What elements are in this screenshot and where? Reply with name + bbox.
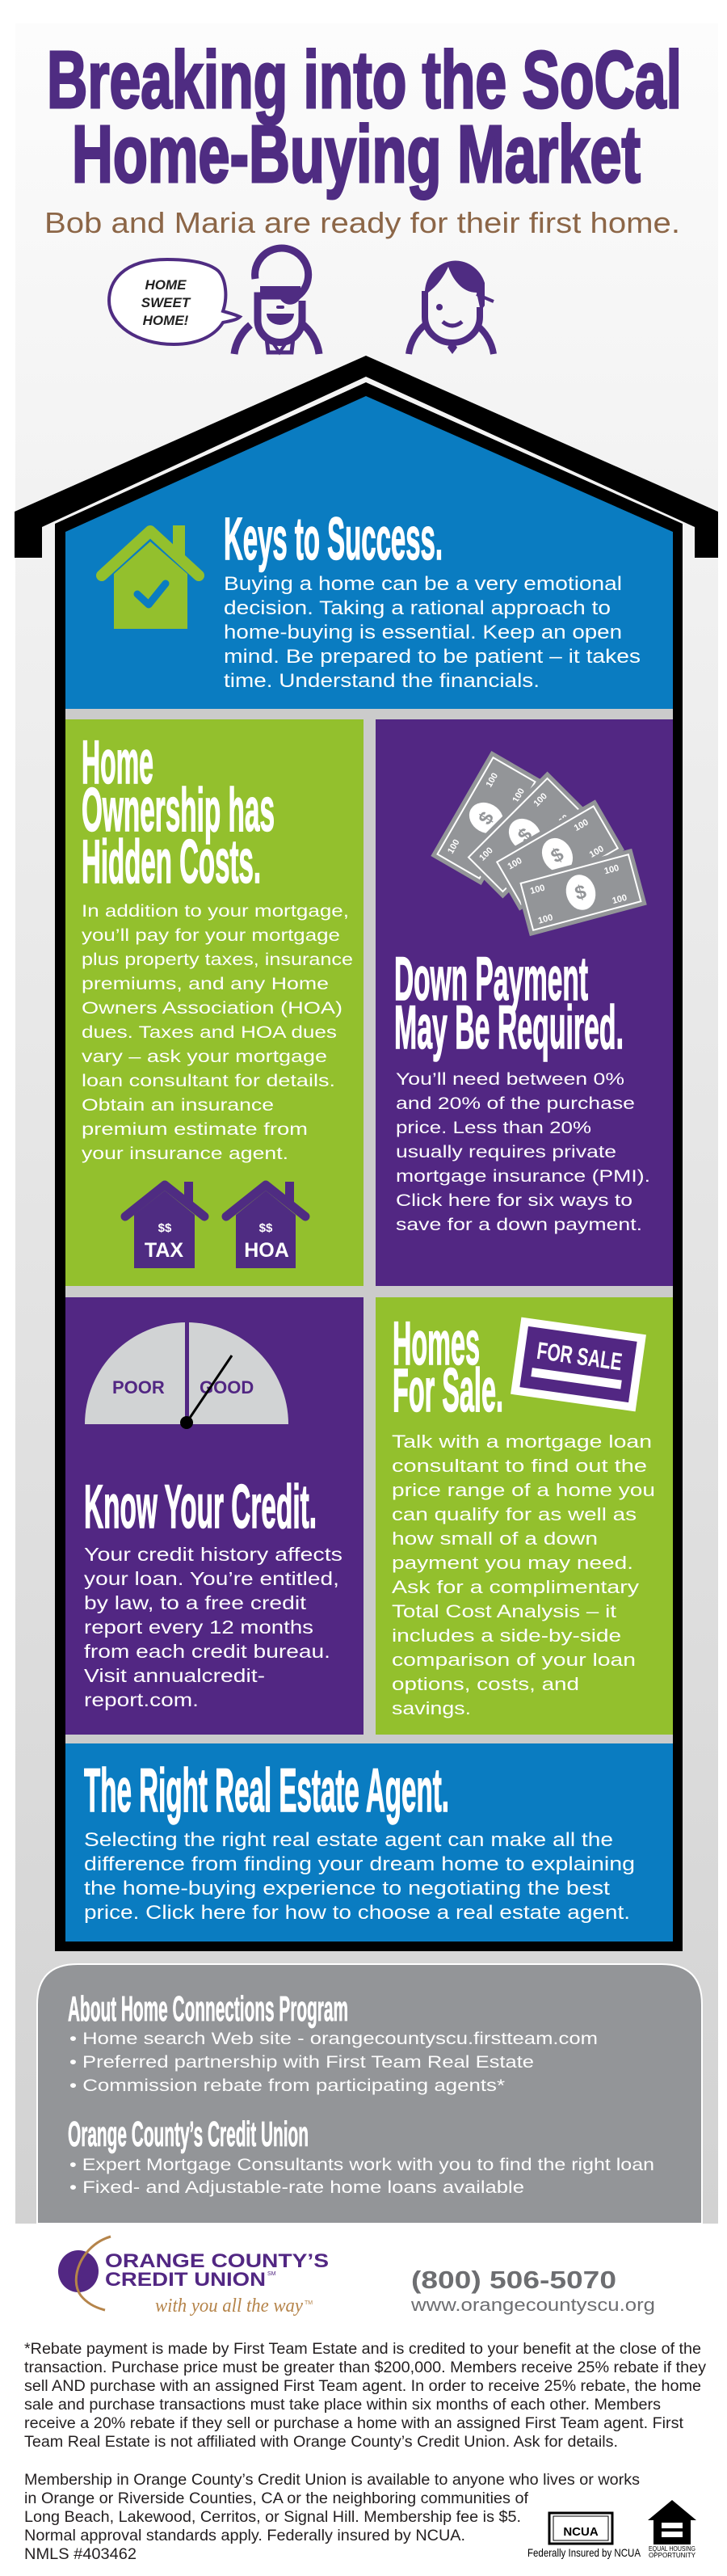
- text: credit body: from each credit bureau.: [84, 1641, 330, 1662]
- icon: tax house: [125, 1182, 204, 1268]
- subtitle: Bob and Maria are ready for their first home.: [44, 206, 680, 239]
- text: membership note: [24, 2472, 640, 2563]
- character: Maria: [409, 261, 494, 354]
- panel: know your credit: Know Your Credit.: [84, 1473, 317, 1541]
- icon: equal housing: [648, 2500, 696, 2559]
- text: credit body: report.com.: [84, 1689, 199, 1710]
- icon: money bills: $: [474, 807, 499, 828]
- speech bubble: SWEET: [141, 295, 191, 310]
- logo: orange county's credit union: CREDIT UNION: [105, 2269, 266, 2291]
- contact: phone and url: [410, 2266, 655, 2315]
- icon: money bills: 100: [553, 813, 571, 830]
- icon: tax house: TAX: [145, 1239, 183, 1262]
- text: keys body: home-buying is essential. Keep an open: [224, 622, 622, 643]
- text: membership note: NMLS #403462: [24, 2546, 137, 2563]
- logo: orange county's credit union: TM: [305, 2300, 313, 2306]
- logo: orange county's credit union: [58, 2237, 329, 2317]
- heading: hidden costs: Home: [82, 728, 153, 797]
- text: down payment body: price. Less than 20%: [396, 1119, 591, 1137]
- text: membership note: Membership in Orange County’s Credit Union is available to anyone who lives or works: [24, 2472, 640, 2489]
- speech bubble: [109, 259, 240, 344]
- icon: ncua logo: [527, 2513, 641, 2559]
- icon: money bills: 100: [499, 867, 517, 885]
- panel: hidden costs: Hidden Costs.: [82, 828, 261, 896]
- heading: homes for sale: [393, 1309, 503, 1425]
- icon: money bills: $: [573, 881, 589, 904]
- text: homes body: Total Cost Analysis – it: [392, 1601, 616, 1621]
- text: hidden costs body: Owners Association (HOA): [82, 999, 342, 1018]
- icon: credit gauge: [85, 1322, 288, 1429]
- icon: money bills: 100: [522, 883, 539, 898]
- text: down payment body: mortgage insurance (PMI).: [396, 1167, 650, 1186]
- icon: money bills: $: [514, 824, 537, 847]
- character: Bob: [234, 248, 319, 354]
- icon: equal housing: EQUAL HOUSING: [649, 2545, 695, 2553]
- text: down payment body: [396, 1070, 650, 1234]
- icon: money bills: 100: [477, 845, 495, 863]
- text: homes body: payment you may need.: [392, 1553, 633, 1573]
- text: homes body: can qualify for as well as: [392, 1504, 637, 1524]
- icon: money bills: [431, 751, 647, 936]
- text: membership note: in Orange or Riverside Counties, CA or the neighboring communities of: [24, 2490, 529, 2507]
- text: hidden costs body: Obtain an insurance: [82, 1096, 274, 1115]
- text: homes body: includes a side-by-side: [392, 1625, 621, 1646]
- contact: phone and url: www.orangecountyscu.org: [410, 2295, 655, 2315]
- text: hidden costs body: dues. Taxes and HOA dues: [82, 1023, 337, 1042]
- icon: money bills: 100: [532, 791, 549, 808]
- text: agent body: [84, 1829, 635, 1924]
- icon: money bills: 100: [529, 883, 546, 896]
- text: program bullets: • Home search Web site - orangecountyscu.firstteam.com: [69, 2030, 598, 2048]
- text: homes body: comparison of your loan: [392, 1650, 636, 1670]
- icon: money bills: 100: [537, 913, 554, 926]
- heading: down payment: [394, 945, 624, 1062]
- icon: equal housing: OPPORTUNITY: [649, 2552, 696, 2559]
- text: membership note: Long Beach, Lakewood, Cerritos, or Signal Hill. Membership fee is $5.: [24, 2509, 521, 2526]
- text: keys body: Buying a home can be a very emotional: [224, 573, 622, 595]
- text: down payment body: You’ll need between 0%: [396, 1070, 624, 1089]
- text: down payment body: usually requires private: [396, 1143, 616, 1162]
- text: credit body: Visit annualcredit-: [84, 1665, 265, 1686]
- icon: money bills: 100: [473, 854, 489, 871]
- text: homes body: options, costs, and: [392, 1674, 579, 1694]
- speech bubble: HOME: [145, 277, 187, 293]
- panel: hidden costs: [65, 719, 364, 1286]
- text: credit body: by law, to a free credit: [84, 1592, 307, 1613]
- icon: for sale sign: [511, 1318, 646, 1411]
- panel: hidden costs: Ownership has: [82, 776, 275, 845]
- text: rebate footnote: transaction. Purchase price must be greater than $200,000. Members receive 25% rebate if they: [24, 2359, 707, 2376]
- icon: for sale sign: FOR SALE: [536, 1338, 624, 1376]
- text: homes body: Ask for a complimentary: [392, 1577, 639, 1597]
- icon: money bills: 100: [588, 844, 606, 860]
- text: homes body: savings.: [392, 1698, 471, 1718]
- icon: money bills: 100: [446, 838, 462, 855]
- text: hidden costs body: vary – ask your mortgage: [82, 1048, 327, 1066]
- panel: homes for sale: [376, 1297, 673, 1735]
- icon: money bills: 100: [506, 856, 523, 871]
- text: down payment body: save for a down payment.: [396, 1216, 642, 1234]
- panel: about program: [37, 1964, 702, 2224]
- icon: money bills: $: [547, 843, 568, 868]
- logo: orange county's credit union: SM: [267, 2271, 276, 2277]
- text: rebate footnote: [24, 2341, 707, 2451]
- icon: hoa house: HOA: [244, 1239, 289, 1262]
- icon: credit gauge: POOR: [112, 1377, 165, 1398]
- icon: ncua logo: Federally Insured by NCUA: [527, 2546, 641, 2559]
- text: hidden costs body: premiums, and any Home: [82, 975, 329, 993]
- logo: orange county's credit union: with you all the way: [155, 2296, 303, 2317]
- panel: down payment: [376, 719, 673, 1286]
- panel: about program: Orange County’s Credit Union: [68, 2114, 309, 2154]
- text: program bullets: • Preferred partnership with First Team Real Estate: [69, 2053, 534, 2072]
- text: down payment body: Click here for six ways to: [396, 1191, 632, 1210]
- panel: real estate agent: [65, 1743, 673, 1941]
- text: rebate footnote: sale and purchase transactions must take place within six months of each other. Members: [24, 2397, 661, 2414]
- speech bubble: HOME!: [143, 313, 189, 328]
- text: down payment body: and 20% of the purchase: [396, 1094, 635, 1113]
- logo: orange county's credit union: ORANGE COUNTY’S: [105, 2250, 329, 2272]
- text: rebate footnote: sell AND purchase with an assigned First Team agent. In order to receive 25% rebate, the home: [24, 2378, 701, 2395]
- house frame: [55, 382, 683, 1951]
- text: agent body: difference from finding your dream home to explaining: [84, 1853, 635, 1875]
- text: homes body: price range of a home you: [392, 1480, 655, 1500]
- text: hidden costs body: loan consultant for details.: [82, 1072, 335, 1090]
- panel: about program: About Home Connections Program: [68, 1989, 348, 2029]
- text: hidden costs body: plus property taxes, insurance: [82, 951, 353, 969]
- text: agent body: price. Click here for how to choose a real estate agent.: [84, 1902, 630, 1924]
- text: credit union bullets: • Expert Mortgage Consultants work with you to find the right loan: [69, 2156, 654, 2174]
- text: credit union bullets: • Fixed- and Adjustable-rate home loans available: [69, 2178, 524, 2197]
- text: hidden costs body: In addition to your mortgage,: [82, 902, 349, 921]
- icon: tax house: $$: [158, 1221, 172, 1235]
- text: agent body: the home-buying experience to negotiating the best: [84, 1878, 610, 1899]
- icon: money bills: 100: [611, 893, 628, 906]
- text: homes body: how small of a down: [392, 1528, 598, 1549]
- text: credit body: your loan. You’re entitled,: [84, 1568, 339, 1589]
- house roof: [15, 356, 718, 558]
- text: rebate footnote: Team Real Estate is not affiliated with Orange County’s Credit Union. Ask for details.: [24, 2434, 618, 2451]
- icon: ncua logo: NCUA: [563, 2525, 599, 2539]
- text: keys body: mind. Be prepared to be patient – it takes: [224, 646, 641, 668]
- text: agent body: Selecting the right real estate agent can make all the: [84, 1829, 613, 1851]
- heading: homes for sale: Homes: [393, 1309, 480, 1378]
- text: credit body: report every 12 months: [84, 1617, 313, 1638]
- icon: money bills: 100: [573, 817, 590, 833]
- text: rebate footnote: receive a 20% rebate if they sell or purchase a home with an assigned First Team agent. First: [24, 2415, 684, 2432]
- text: credit body: Your credit history affects: [84, 1544, 342, 1565]
- panel: keys to success: Keys to Success.: [224, 505, 443, 572]
- text: homes body: [392, 1431, 655, 1718]
- icon: hoa house: [226, 1182, 305, 1268]
- panel: know your credit: [65, 1297, 364, 1735]
- panel: keys to success: [65, 396, 673, 709]
- text: rebate footnote: *Rebate payment is made by First Team Estate and is credited to your benefit at the close of the: [24, 2341, 701, 2358]
- panel: homes for sale: For Sale.: [393, 1356, 503, 1425]
- icon: green house with check: [102, 525, 199, 629]
- text: program bullets: [69, 2030, 598, 2095]
- text: credit union bullets: [69, 2156, 654, 2197]
- text: hidden costs body: [82, 902, 353, 1163]
- icon: credit gauge: GOOD: [200, 1377, 254, 1398]
- text: keys body: time. Understand the financials.: [224, 670, 540, 692]
- text: credit body: [84, 1544, 342, 1710]
- text: homes body: Talk with a mortgage loan: [392, 1431, 652, 1452]
- title: [47, 35, 682, 200]
- text: homes body: consultant to find out the: [392, 1456, 647, 1476]
- icon: money bills: 100: [603, 863, 620, 876]
- text: keys body: decision. Taking a rational approach to: [224, 597, 611, 619]
- text: membership note: Normal approval standards apply. Federally insured by NCUA.: [24, 2528, 465, 2544]
- contact: phone and url: (800) 506-5070: [411, 2266, 616, 2294]
- text: keys body: [224, 573, 641, 692]
- icon: money bills: 100: [485, 771, 500, 789]
- icon: hoa house: $$: [259, 1221, 273, 1235]
- text: program bullets: • Commission rebate from participating agents*: [69, 2076, 505, 2095]
- text: hidden costs body: your insurance agent.: [82, 1145, 288, 1163]
- text: hidden costs body: you’ll pay for your mortgage: [82, 926, 340, 945]
- text: hidden costs body: premium estimate from: [82, 1120, 308, 1139]
- icon: money bills: 100: [511, 786, 527, 804]
- heading: hidden costs: [82, 728, 275, 896]
